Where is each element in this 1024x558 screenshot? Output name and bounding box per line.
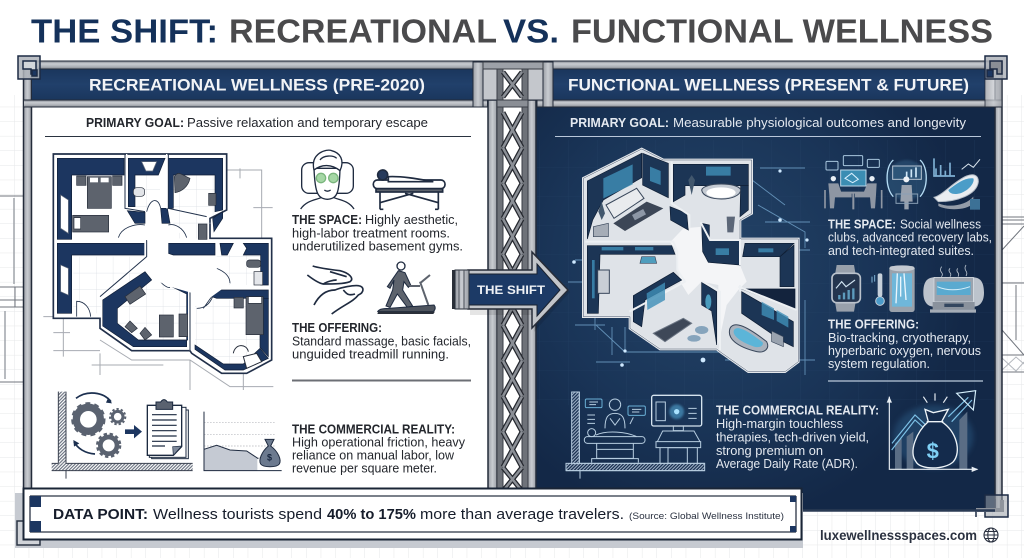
footer website: luxewellnessspaces.com (820, 527, 977, 543)
callout: data point: DATA POINT: (53, 506, 148, 523)
screen core (669, 404, 684, 419)
corner bracket top right (985, 56, 1007, 79)
floor plan: traditional spa (43, 154, 273, 390)
callout: data point: more than average travelers. (420, 506, 624, 523)
steel bands (24, 61, 1002, 107)
arrow: the shift: THE SHIFT (477, 285, 545, 297)
corner bracket top left (18, 56, 40, 79)
icon: cryotherapy chamber (872, 265, 915, 312)
text: commercial reality right: THE COMMERCIAL REALITY: (716, 404, 879, 418)
text: commercial reality left: THE COMMERCIAL REALITY: (292, 422, 455, 436)
icon: facial mask (301, 150, 354, 209)
icon: tech-driven treatment (566, 392, 705, 479)
text: the offering right (828, 318, 983, 381)
wall panels (587, 153, 795, 347)
chart: declining revenue: $ (267, 453, 272, 463)
corner bracket bottom right (976, 495, 1008, 517)
callout: data point (15, 488, 803, 548)
text: commercial reality left: reliance on manual labor, low (292, 448, 455, 462)
text: commercial reality right: High-margin touchless (716, 417, 843, 431)
primary goal left (45, 115, 471, 136)
primary goal right: Measurable physiological outcomes and longevity (673, 115, 967, 130)
text: the space right: and tech-integrated suites. (828, 244, 974, 258)
callout: data point: (Source: Global Wellness Institute) (629, 511, 784, 522)
text: the space right: THE SPACE: (828, 218, 896, 232)
primary goal left: PRIMARY GOAL: (86, 115, 184, 130)
text: the offering right: THE OFFERING: (828, 318, 919, 332)
header bars (32, 69, 473, 100)
primary goal right: PRIMARY GOAL: (570, 115, 669, 130)
text: commercial reality right (716, 404, 879, 471)
icon: social wellness club (825, 156, 882, 209)
text: the space left (292, 213, 463, 254)
title: THE SHIFT: (31, 12, 218, 50)
icon: recovery lab console (887, 160, 927, 209)
icon: treadmill (377, 262, 435, 314)
text: the offering right: hyperbaric oxygen, nervous (828, 344, 981, 358)
heading: functional wellness: FUNCTIONAL WELLNESS (PRESENT & FUTURE) (568, 76, 969, 94)
icon: hands (307, 266, 363, 314)
chart: declining revenue (204, 412, 282, 471)
text: commercial reality left: High operational friction, heavy (292, 436, 466, 450)
central truss (483, 62, 543, 491)
text: commercial reality right: therapies, tech-driven yield, (716, 430, 869, 444)
glow points (572, 169, 809, 367)
icon: hyperbaric chamber (923, 265, 984, 313)
primary goal left: Passive relaxation and temporary escape (187, 115, 428, 130)
text: the space right: Social wellness (900, 218, 981, 232)
text: commercial reality left: revenue per square meter. (292, 462, 437, 476)
glowing screens (592, 164, 788, 328)
text: the offering left: Standard massage, basic facials, (292, 334, 471, 348)
text: the offering left (292, 321, 471, 380)
circuit lines (568, 168, 815, 375)
icon: money bag with rising arrow (887, 391, 978, 472)
title: FUNCTIONAL WELLNESS (571, 12, 993, 50)
callout: data point: 40% to 175% (327, 506, 416, 523)
title: RECREATIONAL (229, 12, 497, 50)
text: the space left: Highly aesthetic, (365, 213, 458, 227)
text: the space left: high-labor treatment rooms. (292, 226, 450, 240)
text: the space left: THE SPACE: (292, 213, 362, 227)
panel: functional wellness (536, 107, 995, 510)
text: the offering left: unguided treadmill running. (292, 348, 449, 362)
text: the space right: clubs, advanced recovery labs, (828, 230, 992, 244)
door swings (77, 201, 230, 317)
floor plan: tech-integrated suites (583, 149, 798, 372)
icon: smart watch (832, 265, 860, 312)
title: VS. (503, 12, 559, 50)
primary goal right (555, 115, 981, 136)
icon: recovery pod (934, 158, 980, 210)
icon: money bag with rising arrow: $ (927, 438, 939, 463)
arrow: the shift (452, 252, 570, 332)
text: the offering left: THE OFFERING: (292, 321, 382, 335)
text: the space left: underutilized basement gyms. (292, 240, 463, 254)
heading: recreational wellness: RECREATIONAL WELLNESS (PRE-2020) (89, 76, 425, 94)
text: commercial reality right: Average Daily Rate (ADR). (716, 457, 858, 471)
text: commercial reality right: strong premium on (716, 444, 823, 458)
icon: globe (984, 528, 998, 542)
text: commercial reality left (292, 422, 466, 476)
callout: data point: Wellness tourists spend (153, 506, 322, 523)
suite furniture (606, 188, 644, 218)
icon: gears and paperwork (52, 392, 193, 479)
walls (57, 158, 268, 370)
panel: recreational wellness (31, 107, 488, 491)
text: the offering right: system regulation. (828, 357, 930, 371)
steel frame (18, 56, 1008, 517)
text: the offering right: Bio-tracking, cryotherapy, (828, 331, 971, 345)
text: the space right (828, 218, 992, 258)
left and right posts (24, 69, 1002, 510)
title (31, 12, 993, 50)
icon: massage table (373, 170, 445, 209)
furniture (73, 173, 263, 340)
